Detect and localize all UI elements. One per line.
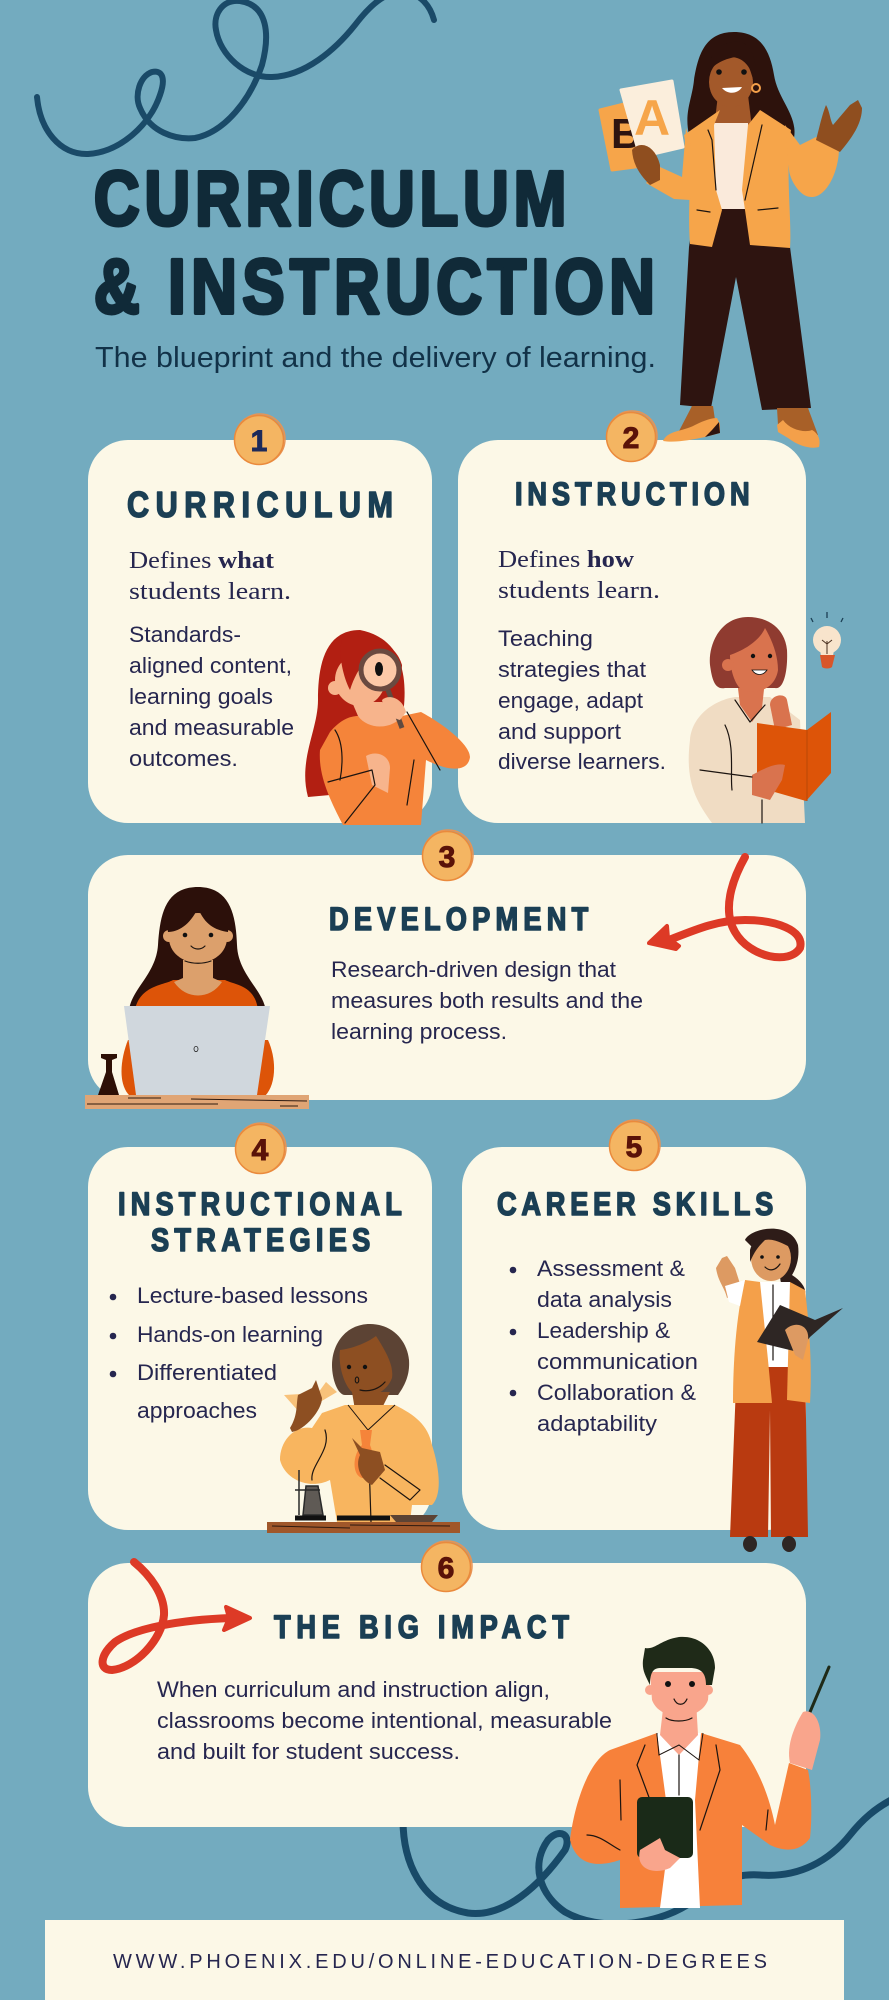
bullet list: career skills: adaptability — [537, 1411, 657, 1436]
number badge 3: 3 — [439, 841, 455, 874]
heading: instructional strategies: STRATEGIES — [151, 1223, 370, 1259]
body text: instruction: engage, adapt — [498, 688, 643, 713]
body text: the big impact: and built for student success. — [157, 1739, 460, 1764]
definition text: curriculum: Defines what — [129, 548, 274, 574]
heading: instructional strategies: INSTRUCTIONAL — [118, 1187, 402, 1223]
number badge 2 — [606, 411, 657, 462]
body text: curriculum: outcomes. — [129, 746, 238, 771]
body text: the big impact: When curriculum and instruction align, — [157, 1677, 550, 1702]
definition text: instruction: Defines how — [498, 547, 635, 573]
definition text: curriculum — [129, 548, 291, 605]
number badge 6: 6 — [438, 1552, 454, 1585]
letter cards: A — [634, 90, 670, 146]
body text: instruction: diverse learners. — [498, 749, 666, 774]
illustration: woman with book — [689, 617, 831, 823]
body text: instruction: strategies that — [498, 657, 646, 682]
definition text: instruction — [498, 547, 660, 604]
panel: curriculum — [88, 440, 470, 825]
number badge 3 — [422, 830, 473, 880]
body text: instruction: and support — [498, 719, 621, 744]
body text: development: Research-driven design that — [331, 957, 616, 982]
body text: development: learning process. — [331, 1019, 507, 1044]
arrow: red curl pointing right — [103, 1562, 250, 1670]
number badge 6 — [422, 1541, 472, 1592]
footer — [45, 1920, 844, 2000]
number badge 4: 4 — [252, 1134, 269, 1167]
body text: instruction: Teaching — [498, 626, 593, 651]
bullet list: career skills: Assessment & — [537, 1256, 685, 1281]
illustration: woman with open book — [716, 1229, 843, 1552]
heading: instruction: INSTRUCTION — [515, 477, 750, 513]
number badge 1: 1 — [251, 425, 267, 458]
bullet list: instructional strategies: Differentiated — [137, 1360, 277, 1385]
bullet list: career skills: data analysis — [537, 1287, 672, 1312]
panel: the big impact — [88, 1562, 829, 1908]
number badge 1 — [234, 414, 285, 464]
bullet list: career skills: communication — [537, 1349, 698, 1374]
heading: development: DEVELOPMENT — [329, 902, 588, 938]
number badge 4 — [236, 1123, 286, 1174]
decorative swirl: top — [37, 0, 434, 154]
number badge 2: 2 — [623, 422, 639, 455]
illustration: woman presenting letter cards — [600, 32, 862, 448]
bullet list: career skills: Leadership & — [537, 1318, 670, 1343]
body text: curriculum: Standards- — [129, 622, 241, 647]
decorative swirl: bottom — [403, 1798, 889, 1924]
heading: curriculum: CURRICULUM — [127, 486, 393, 526]
panel: development — [85, 855, 806, 1109]
definition text: instruction: students learn. — [498, 578, 660, 604]
subtitle: The blueprint and the delivery of learning. — [95, 342, 656, 374]
illustration: woman with magnifying glass — [305, 630, 470, 825]
footer url: WWW.PHOENIX.EDU/ONLINE-EDUCATION-DEGREES — [113, 1951, 767, 1973]
body text: curriculum — [129, 622, 294, 771]
letter cards: B — [611, 110, 641, 157]
body text: the big impact: classrooms become intentional, measurable — [157, 1708, 612, 1733]
definition text: curriculum: students learn. — [129, 579, 291, 605]
panel: instructional strategies — [88, 1147, 460, 1533]
bullet list: career skills — [510, 1256, 698, 1436]
icon: light bulb — [811, 612, 843, 668]
bullet list: instructional strategies: Lecture-based lessons — [137, 1283, 368, 1308]
body text: curriculum: aligned content, — [129, 653, 292, 678]
illustration: woman at laptop — [85, 887, 309, 1109]
heading: the big impact: THE BIG IMPACT — [274, 1610, 569, 1646]
title — [94, 155, 655, 329]
heading: career skills: CAREER SKILLS — [497, 1187, 773, 1223]
body text: the big impact — [157, 1677, 612, 1764]
illustration: scientist with flasks — [267, 1324, 460, 1533]
number badge 5 — [610, 1120, 660, 1170]
body text: development: measures both results and the — [331, 988, 643, 1013]
heading: instructional strategies — [118, 1187, 402, 1259]
title: & INSTRUCTION — [94, 243, 655, 329]
title: CURRICULUM — [94, 155, 566, 241]
body text: instruction — [498, 626, 666, 774]
illustration: teacher with pointer and tablet — [570, 1637, 829, 1908]
bullet list: career skills: Collaboration & — [537, 1380, 696, 1405]
body text: curriculum: and measurable — [129, 715, 294, 740]
bullet list: instructional strategies: Hands-on learning — [137, 1322, 323, 1347]
body text: development — [331, 957, 643, 1044]
bullet list: instructional strategies: approaches — [137, 1398, 257, 1423]
panel: instruction — [458, 440, 843, 823]
bullet list: instructional strategies — [110, 1283, 368, 1423]
arrow: red curl pointing left — [649, 857, 801, 957]
panel: career skills — [462, 1147, 843, 1552]
number badge 5: 5 — [626, 1131, 642, 1164]
letter cards — [600, 81, 683, 170]
body text: curriculum: learning goals — [129, 684, 273, 709]
